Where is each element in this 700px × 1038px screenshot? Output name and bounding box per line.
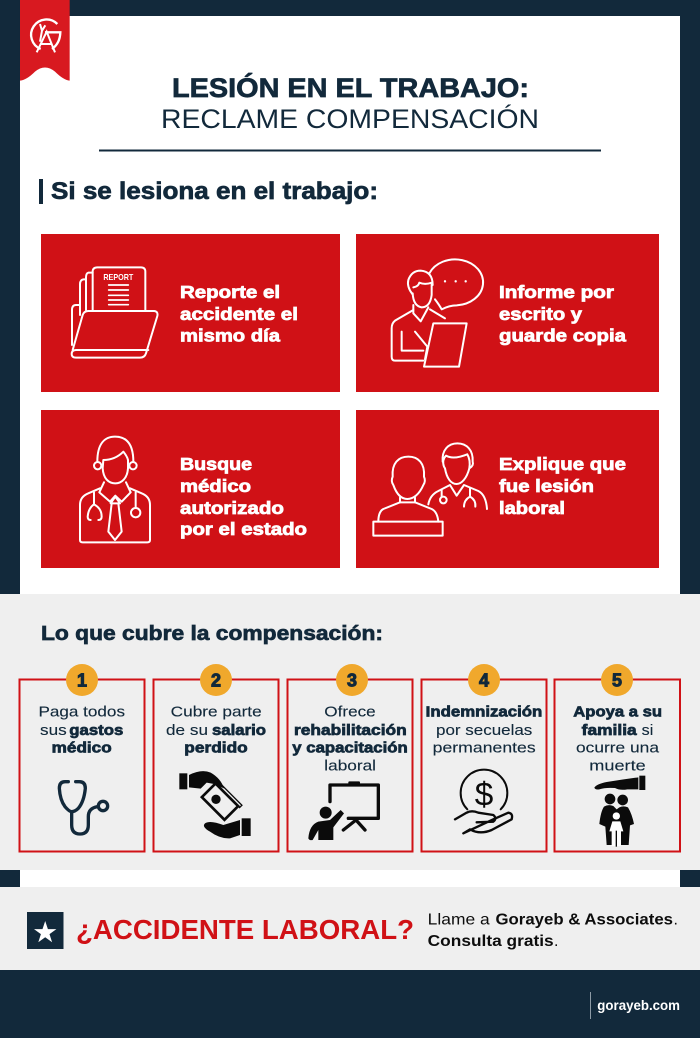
- card text: fue lesión: [499, 476, 594, 496]
- heading: si se lesiona: Si se lesiona en el trabajo:: [51, 178, 378, 205]
- icon: patient and doctor: [373, 443, 487, 536]
- text: rehabilitación: y capacitación: [292, 740, 408, 757]
- card text: guarde copia: [499, 326, 626, 346]
- icon: person writing with speech bubble: [392, 259, 483, 367]
- text: salario: perdido: [184, 740, 248, 757]
- panel: cobertura 1: [20, 664, 144, 852]
- text: salario: de su: [166, 722, 208, 739]
- text: familia: familia: [582, 722, 637, 739]
- card text: [499, 454, 626, 518]
- text: llame a gorayeb: .: [554, 933, 558, 950]
- icon: GA logo: [31, 19, 60, 52]
- icon: star badge: [27, 912, 64, 949]
- text: rehabilitación: Ofrece: [324, 704, 376, 720]
- panel: cobertura 4: [422, 664, 546, 852]
- text: gastos: Paga todos: [38, 704, 125, 720]
- text: indemnización: Indemnización: [426, 704, 542, 720]
- text: familia: Apoya a su: [573, 704, 662, 720]
- text: gastos: médico: [52, 740, 112, 757]
- card text: Busque: [180, 454, 252, 474]
- title: LESIÓN EN EL TRABAJO:: [172, 72, 529, 103]
- callout: accidente laboral: ¿ACCIDENTE LABORAL?: [76, 914, 414, 945]
- text: gastos: [38, 704, 125, 757]
- card text: por el estado: [180, 519, 307, 539]
- card text: Informe por: [499, 282, 614, 302]
- text: familia: ocurre una: [576, 740, 660, 757]
- card text: médico: [180, 476, 251, 496]
- card text: [180, 282, 298, 346]
- text: indemnización: [426, 704, 542, 757]
- icon: report folder: REPORT: [103, 272, 133, 282]
- text: llame a gorayeb: [428, 911, 678, 950]
- panel: cobertura 3: [288, 664, 412, 852]
- panel: cobertura 5: 5: [612, 670, 622, 690]
- icon: instructor at board: [308, 781, 378, 840]
- panel: cobertura 2: [154, 664, 278, 852]
- icon: stethoscope: [59, 782, 108, 834]
- icon: hands exchanging money: [179, 771, 251, 838]
- card text: [499, 282, 626, 346]
- card text: [180, 454, 307, 539]
- icon: report folder: [72, 267, 158, 358]
- text: gastos: sus: [40, 722, 67, 739]
- panel: cobertura 2: 2: [211, 670, 221, 690]
- icon: hand with dollar coin: [455, 770, 512, 833]
- panel: informe: [356, 234, 659, 392]
- text: familia: muerte: [589, 758, 646, 775]
- footer website: gorayeb.com: [597, 998, 680, 1013]
- icon: doctor: [80, 437, 150, 542]
- panel: cobertura 1: 1: [77, 670, 87, 690]
- text: llame a gorayeb: Llame a: [428, 911, 490, 928]
- footer website: [590, 992, 680, 1019]
- text: salario: salario: [212, 722, 266, 739]
- icon: hand over family: [594, 776, 645, 847]
- card text: mismo día: [180, 326, 280, 346]
- panel: explique: [356, 410, 659, 568]
- text: gastos: gastos: [69, 722, 123, 739]
- text: indemnización: permanentes: [433, 740, 536, 757]
- panel: médico: [41, 410, 340, 568]
- text: salario: [166, 704, 266, 757]
- title: RECLAME COMPENSACIÓN: [161, 103, 539, 134]
- text: familia: [573, 704, 662, 775]
- card text: escrito y: [499, 304, 582, 324]
- card text: autorizado: [180, 498, 284, 518]
- heading: lo que cubre: Lo que cubre la compensación:: [41, 622, 383, 645]
- card text: laboral: [499, 498, 565, 518]
- card text: Explique que: [499, 454, 626, 474]
- title: [161, 72, 539, 134]
- card text: accidente el: [180, 304, 298, 324]
- text: llame a gorayeb: Gorayeb & Associates: [496, 911, 673, 928]
- panel: cobertura 4: 4: [479, 670, 489, 690]
- logo ribbon: [20, 0, 70, 81]
- panel: cobertura 3: 3: [347, 670, 357, 690]
- text: llame a gorayeb: Consulta gratis: [428, 933, 554, 950]
- text: llame a gorayeb: .: [674, 911, 678, 928]
- text: rehabilitación: [292, 704, 408, 775]
- text: salario: Cubre parte: [171, 704, 262, 720]
- icon: hand with dollar coin: $: [475, 777, 493, 814]
- text: rehabilitación: rehabilitación: [294, 722, 407, 739]
- card text: Reporte el: [180, 282, 280, 302]
- panel: reporte: [41, 234, 340, 392]
- text: indemnización: por secuelas: [436, 722, 532, 739]
- panel: cobertura 5: [554, 664, 680, 852]
- text: familia: si: [642, 722, 653, 739]
- text: rehabilitación: laboral: [324, 758, 376, 775]
